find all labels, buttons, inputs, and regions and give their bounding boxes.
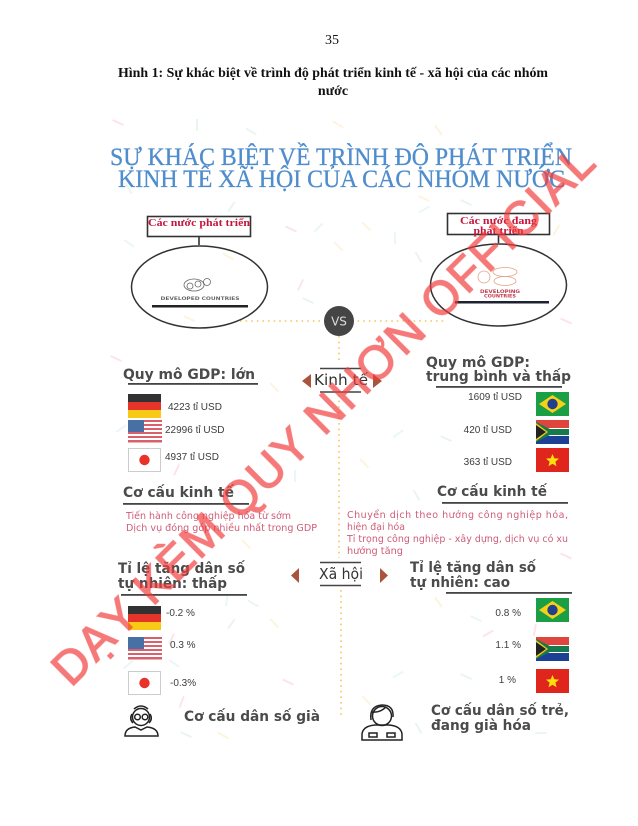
heading: natural growth low: Tỉ lệ tăng dân số [118, 560, 245, 577]
title: SỰ KHÁC BIỆT VỀ TRÌNH ĐỘ PHÁT TRIỂN [110, 142, 572, 171]
heading: GDP medium and low: Quy mô GDP: [426, 355, 530, 371]
label: society: Xã hội [319, 565, 363, 583]
heading: natural growth high [410, 559, 572, 594]
panel: developing countries: COUNTRIES [484, 294, 516, 298]
growth list: developing: 1.1 % [495, 640, 521, 651]
growth list: developing [495, 598, 569, 693]
panel: developing countries: DEVELOPING [480, 289, 520, 294]
title [110, 142, 572, 193]
panel: developing countries: Các nước đang [460, 215, 538, 227]
panel: developed countries [132, 216, 268, 328]
GDP list: developed: 22996 tỉ USD [165, 424, 224, 436]
text: economic structure developing: Chuyển dịch theo hướng công nghiệp hóa, [347, 510, 568, 521]
VS badge [324, 306, 354, 336]
watermark: DẠY KÈM QUY NHƠN OFFICIAL [41, 135, 605, 695]
heading: GDP large: Quy mô GDP: lớn [123, 367, 255, 383]
heading: economic structure right [437, 483, 568, 504]
VS badge: VS [331, 314, 347, 328]
dotted connector lines [240, 321, 446, 716]
heading: economic structure right: Cơ cấu kinh tế [437, 483, 547, 500]
text: economic structure developed [125, 511, 317, 534]
GDP list: developed: 4223 tỉ USD [168, 401, 222, 413]
label: economy: Kinh tế [314, 371, 368, 389]
heading: natural growth low: tự nhiên: thấp [118, 575, 227, 592]
confetti background [110, 119, 572, 739]
title: KINH TẾ XÃ HỘI CỦA CÁC NHÓM NƯỚC [118, 164, 565, 193]
text: economic structure developing: Tỉ trọng công nghiệp - xây dựng, dịch vụ có xu [346, 534, 568, 545]
heading: natural growth high: Tỉ lệ tăng dân số [410, 559, 536, 576]
icon: young person [362, 705, 402, 740]
label: economy [302, 368, 382, 392]
GDP list: developed [128, 394, 224, 472]
infographic [110, 119, 572, 740]
figure caption: Hình 1: Sự khác biệt về trình độ phát triển kinh tế - xã hội của các nhóm [118, 66, 548, 81]
growth list: developing: 1 % [499, 675, 516, 686]
GDP list: developing: 420 tỉ USD [464, 424, 512, 436]
GDP list: developing [464, 391, 569, 472]
label: society [291, 562, 388, 586]
text: aging population: Cơ cấu dân số già [184, 708, 320, 725]
page number: 35 [325, 33, 339, 48]
panel: developed countries: Các nước phát triển [148, 217, 250, 229]
growth list: developed: 0.3 % [170, 640, 196, 651]
heading: GDP medium and low [426, 355, 571, 388]
text: economic structure developing: hiện đại hóa [347, 522, 405, 533]
heading: economic structure left: Cơ cấu kinh tế [123, 484, 234, 501]
panel: developing countries: phát triển [474, 225, 524, 237]
figure caption [118, 66, 548, 99]
icon: old person [125, 706, 158, 736]
growth list: developed [128, 606, 196, 694]
text: young, aging population: đang già hóa [431, 718, 531, 734]
text: young, aging population: Cơ cấu dân số trẻ, [431, 702, 569, 719]
growth list: developed: -0.3% [170, 678, 196, 689]
figure caption: nước [318, 84, 348, 99]
growth list: developed: -0.2 % [166, 608, 195, 619]
panel: developed countries: DEVELOPED COUNTRIES [160, 296, 240, 301]
GDP list: developing: 363 tỉ USD [464, 456, 512, 468]
heading: GDP medium and low: trung bình và thấp [426, 368, 571, 385]
growth list: developing: 0.8 % [495, 608, 521, 619]
panel: developing countries [430, 214, 566, 326]
heading: natural growth low [118, 560, 247, 596]
text: economic structure developing [346, 510, 568, 557]
text: young, aging population [431, 702, 569, 734]
GDP list: developed: 4937 tỉ USD [165, 451, 219, 463]
GDP list: developing: 1609 tỉ USD [468, 391, 522, 403]
text: economic structure developed: Dịch vụ đóng góp nhiều nhất trong GDP [126, 523, 317, 534]
text: economic structure developed: Tiến hành công nghiệp hóa từ sớm [125, 511, 291, 522]
text: economic structure developing: hướng tăng [347, 546, 403, 557]
heading: natural growth high: tự nhiên: cao [410, 575, 510, 591]
